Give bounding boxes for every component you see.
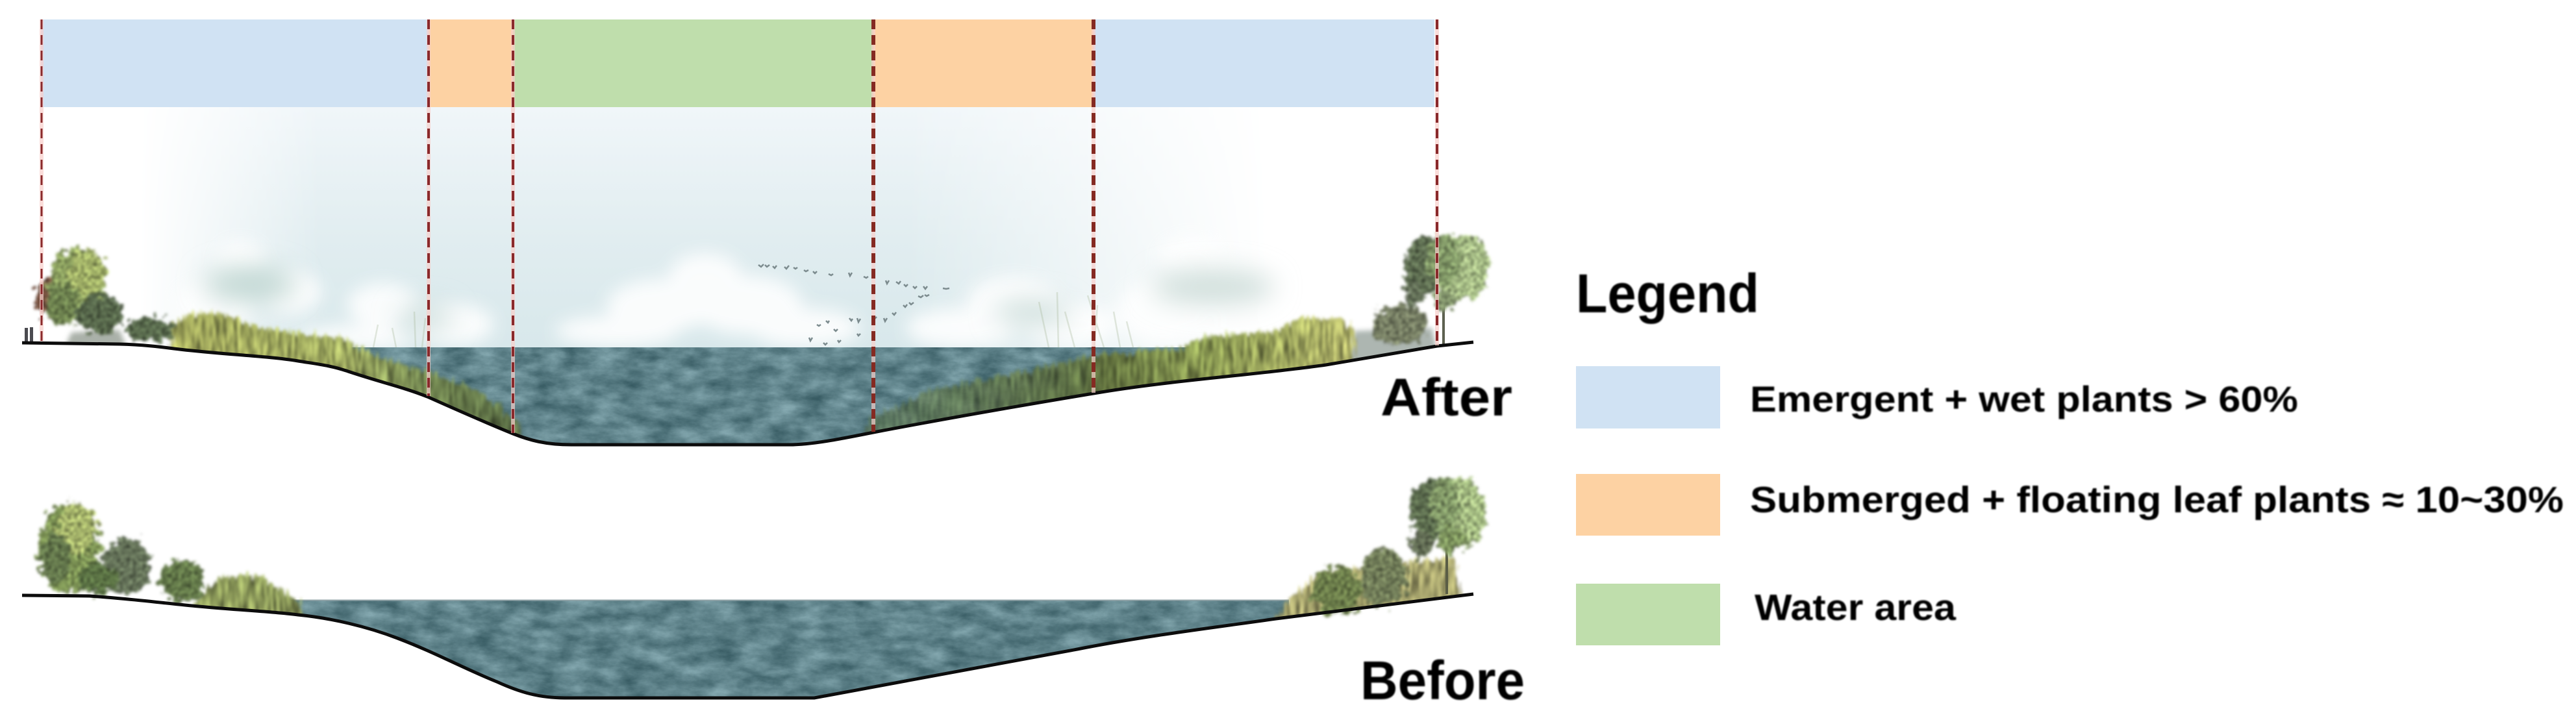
sky background xyxy=(185,107,1166,347)
panel: after section xyxy=(22,19,1512,454)
tree group: right bank xyxy=(1312,477,1486,615)
clouds xyxy=(175,237,1338,351)
panel: before section xyxy=(22,477,1525,711)
label: After: After xyxy=(1381,368,1512,427)
legend item: submerged and floating leaf plants: Submerged + floating leaf plants ≈ 10~30% xyxy=(1750,479,2564,521)
legend item: water area xyxy=(1576,584,1957,645)
tree group: left bank xyxy=(36,248,174,342)
legend xyxy=(1576,263,2564,645)
label: Before: Before xyxy=(1360,650,1525,711)
tree group: right bank xyxy=(1373,234,1490,345)
water body xyxy=(289,600,1289,698)
zone colour bands xyxy=(41,19,1434,107)
people xyxy=(25,327,33,341)
wetland planting xyxy=(170,313,1354,454)
gravel banks xyxy=(64,325,1436,359)
faint reeds rising over water xyxy=(373,292,1133,347)
zone dividers xyxy=(42,19,1437,433)
wetland planting xyxy=(188,558,1464,627)
legend heading: Legend xyxy=(1576,263,1759,324)
ground profile: before xyxy=(22,594,1473,698)
birds flock xyxy=(758,264,949,345)
water body xyxy=(348,347,1208,445)
legend item: emergent and wet plants: Emergent + wet plants > 60% xyxy=(1750,379,2298,419)
water surface line xyxy=(292,600,1289,601)
legend item: submerged and floating leaf plants xyxy=(1576,474,2564,536)
legend item: emergent and wet plants xyxy=(1576,366,2298,428)
legend item: water area: Water area xyxy=(1755,587,1957,628)
ground profile: after xyxy=(22,342,1473,445)
tree group: left bank xyxy=(37,503,204,603)
